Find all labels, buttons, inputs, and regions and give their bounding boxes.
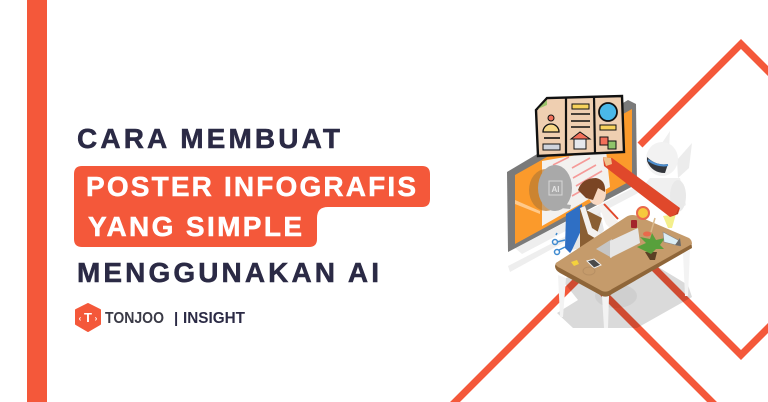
icon: hexagon logo	[76, 304, 100, 331]
shelf below monitor	[508, 186, 640, 272]
background zigzag lines	[452, 44, 768, 402]
AI chip speech bubble	[529, 165, 572, 211]
potted plant	[637, 233, 665, 260]
wordmark: TONJOO	[105, 310, 164, 327]
section name: INSIGHT	[183, 310, 245, 327]
desk items	[571, 259, 601, 275]
person at chair	[565, 178, 625, 253]
highlight box	[74, 166, 430, 247]
title line 2: POSTER INFOGRAFIS	[86, 171, 416, 202]
AI chip speech bubble: AI	[552, 185, 560, 194]
divider: |	[174, 310, 178, 327]
illustration: AI workspace	[507, 96, 692, 328]
icon: hexagon logo: ›	[95, 314, 98, 323]
icon: hexagon logo: ‹	[79, 314, 82, 323]
left accent bar	[27, 0, 47, 402]
icon: hexagon logo: T	[84, 310, 92, 325]
infographic poster	[536, 96, 624, 156]
computer monitor	[507, 100, 637, 252]
title line 1: CARA MEMBUAT	[77, 123, 340, 154]
desk	[555, 215, 692, 328]
desk lamp and mug	[631, 207, 655, 236]
title line 3: YANG SIMPLE	[88, 211, 302, 242]
floor shadows	[557, 262, 692, 328]
pencil	[603, 157, 680, 217]
tablet	[663, 232, 681, 246]
scissors icon	[552, 233, 565, 254]
robot	[640, 131, 692, 228]
laptop	[596, 228, 640, 258]
brand logo	[76, 304, 245, 331]
title line 4: MENGGUNAKAN AI	[77, 257, 379, 288]
